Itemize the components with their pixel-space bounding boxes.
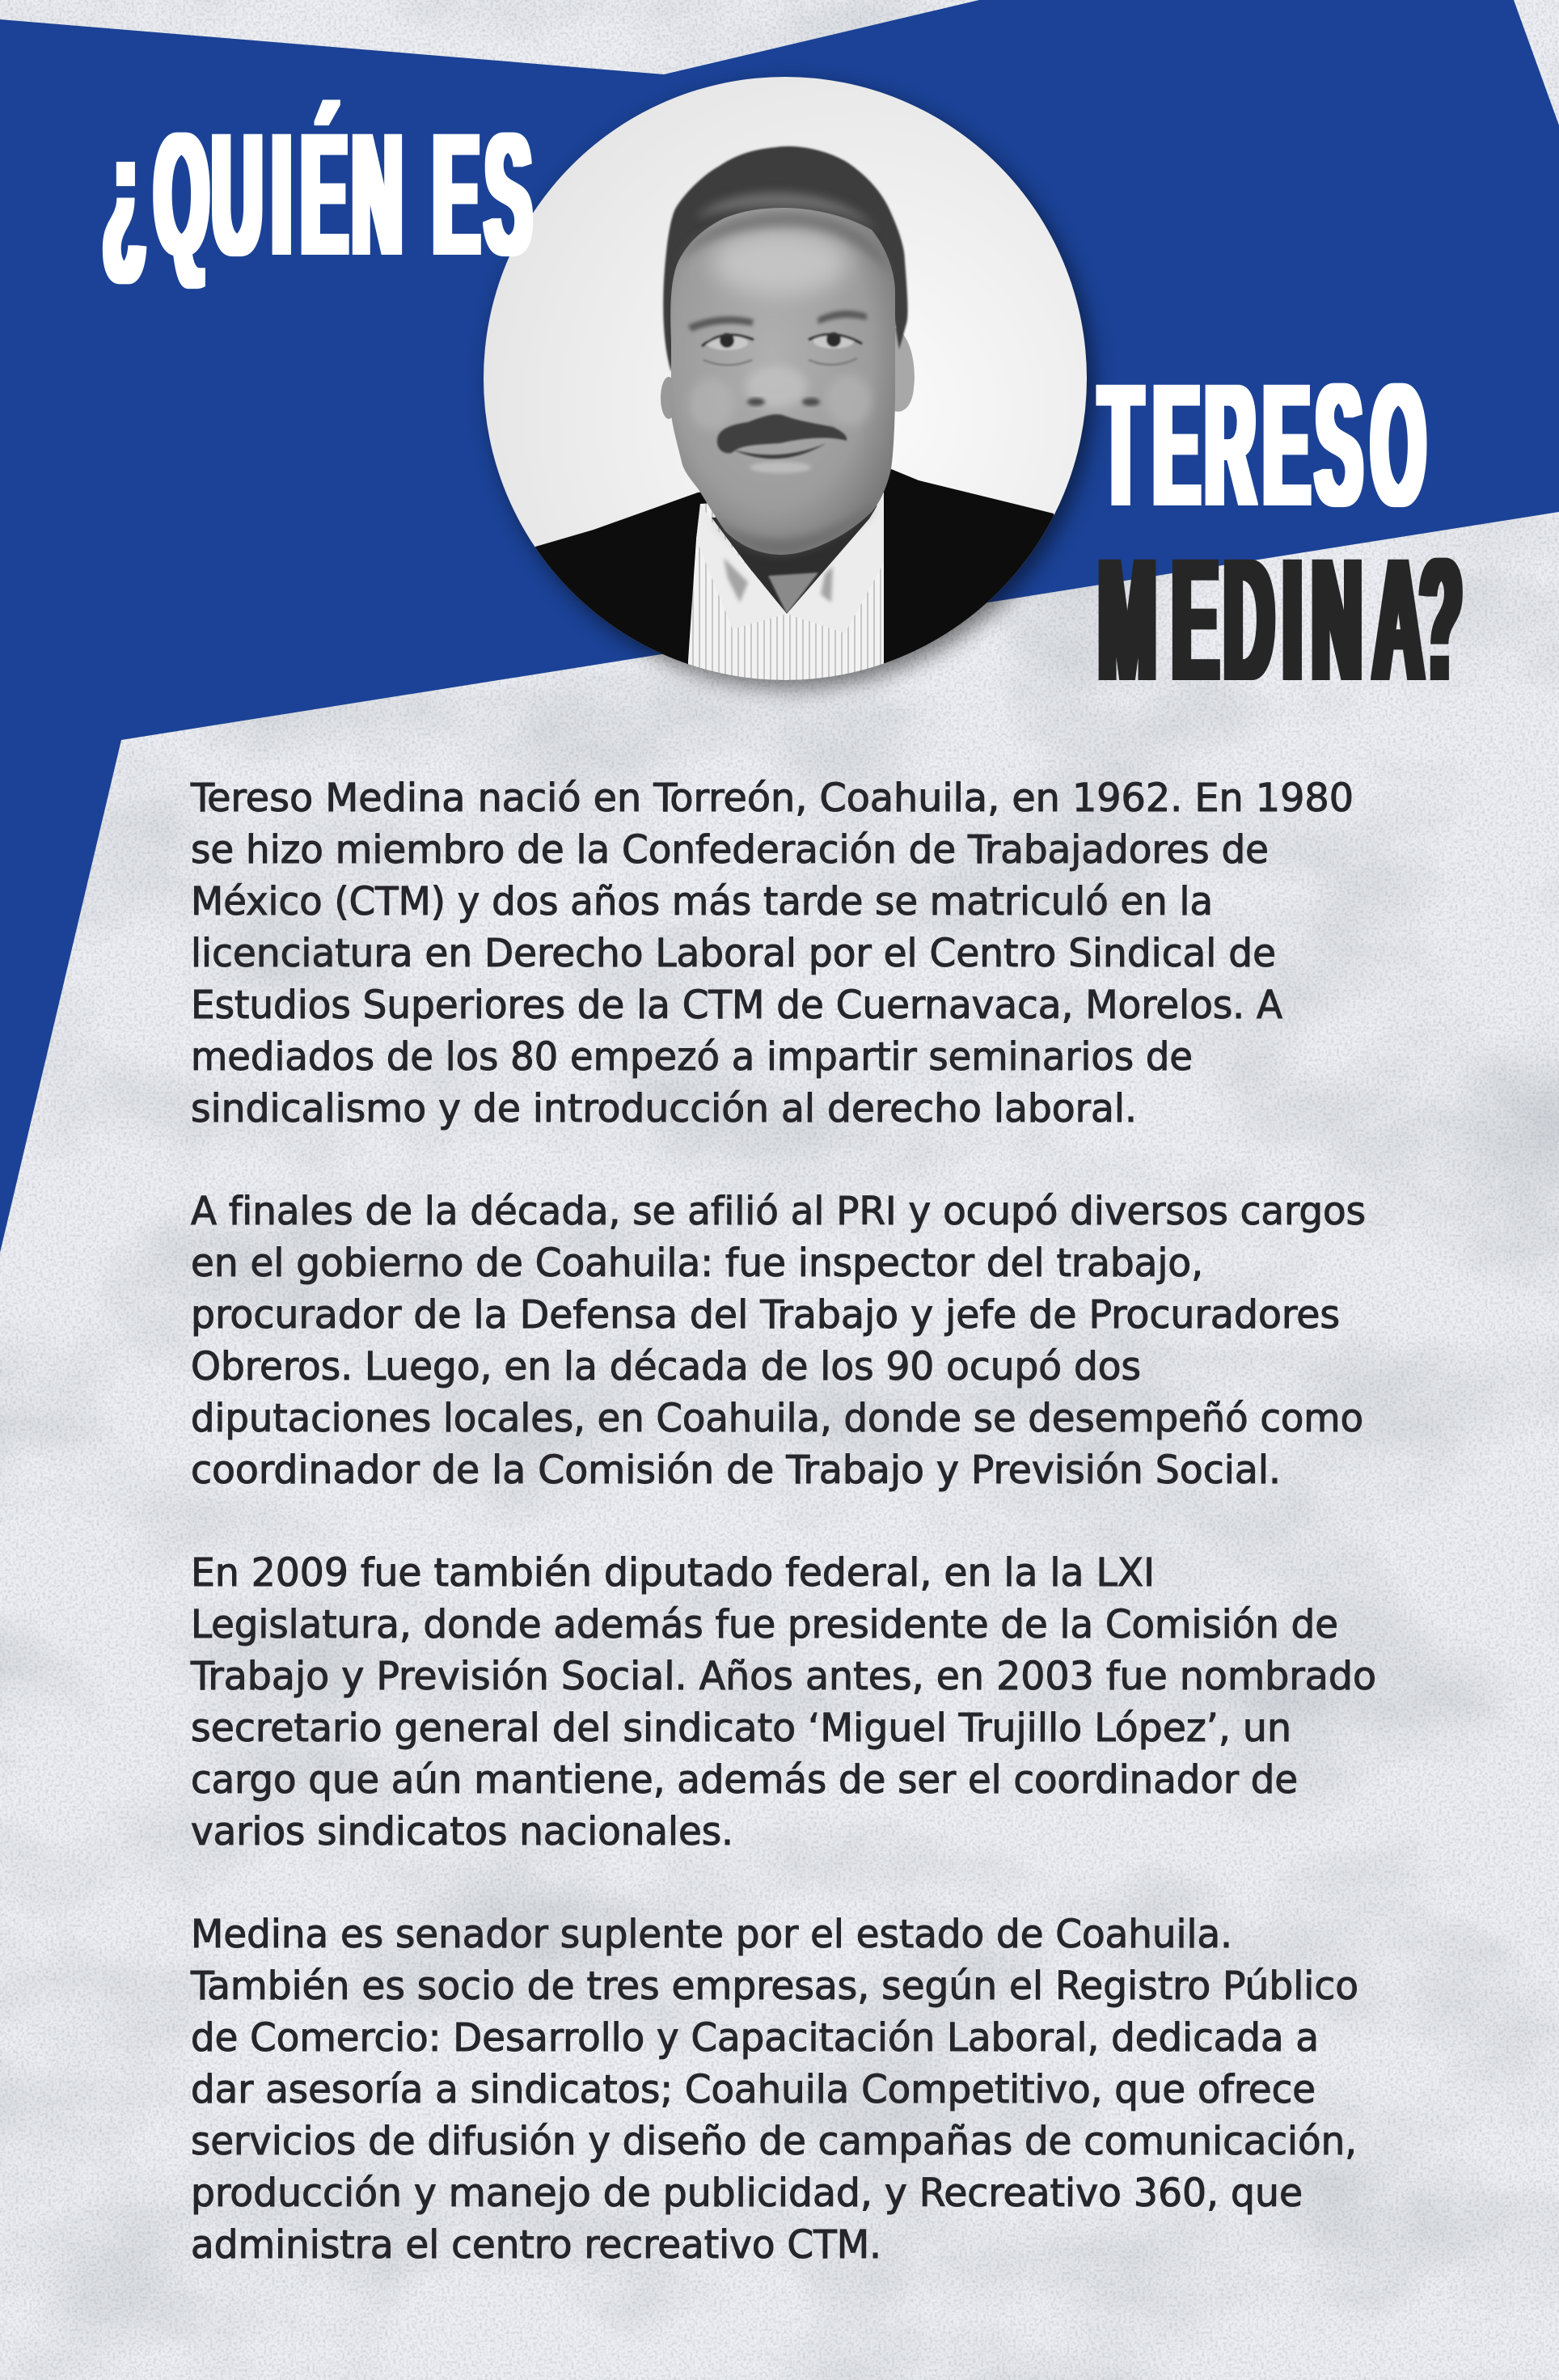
paragraph 2: coordinador de la Comisión de Trabajo y Previsión Social. xyxy=(191,1448,1281,1493)
paragraph 1: licenciatura en Derecho Laboral por el Centro Sindical de xyxy=(191,931,1276,976)
ears xyxy=(661,377,671,419)
eye bags xyxy=(703,358,857,366)
paragraph 1: México (CTM) y dos años más tarde se matriculó en la xyxy=(191,879,1213,924)
paragraph 4: dar asesoría a sindicatos; Coahuila Competitivo, que ofrece xyxy=(191,2067,1316,2112)
title: TERESO: TERESO xyxy=(1100,348,1426,542)
paragraph 4: producción y manejo de publicidad, y Recreativo 360, que xyxy=(191,2171,1303,2216)
paragraph 2: diputaciones locales, en Coahuila, donde se desempeñó como xyxy=(191,1396,1363,1441)
paragraph 2: A finales de la década, se afilió al PRI y ocupó diversos cargos xyxy=(191,1189,1366,1234)
paragraph 4 xyxy=(190,1912,1358,2268)
paragraph 3 xyxy=(190,1550,1376,1854)
paragraph 2: procurador de la Defensa del Trabajo y jefe de Procuradores xyxy=(191,1292,1340,1338)
paragraph 1: sindicalismo y de introducción al derecho laboral. xyxy=(191,1086,1137,1131)
paragraph 3: Trabajo y Previsión Social. Años antes, en 2003 fue nombrado xyxy=(190,1654,1376,1699)
paragraph 1: Estudios Superiores de la CTM de Cuernavaca, Morelos. A xyxy=(191,983,1283,1028)
paragraph 2 xyxy=(191,1189,1366,1493)
hair xyxy=(663,146,907,372)
paragraph 4: También es socio de tres empresas, según el Registro Público xyxy=(190,1964,1358,2009)
portrait photo xyxy=(477,73,1093,695)
paragraph 3: En 2009 fue también diputado federal, en la la LXI xyxy=(191,1550,1155,1596)
eyes xyxy=(702,332,862,350)
cheek highlights xyxy=(689,374,872,430)
paragraph 1: mediados de los 80 empezó a impartir seminarios de xyxy=(191,1034,1193,1080)
paragraph 1 xyxy=(190,776,1354,1131)
forehead highlight xyxy=(712,230,849,295)
paragraph 2: en el gobierno de Coahuila: fue inspector del trabajo, xyxy=(191,1241,1203,1286)
title: MEDINA?: MEDINA? xyxy=(1098,522,1462,717)
title: ¿QUIÉN ES: ¿QUIÉN ES xyxy=(104,97,531,291)
eyebrows xyxy=(688,311,867,332)
shirt xyxy=(688,492,884,695)
paragraph 4: administra el centro recreativo CTM. xyxy=(191,2222,881,2268)
paragraph 1: Tereso Medina nació en Torreón, Coahuila, en 1962. En 1980 xyxy=(190,776,1354,821)
blue header shape xyxy=(0,0,1559,1253)
moustache xyxy=(717,414,847,453)
paragraph 3: secretario general del sindicato ‘Miguel Trujillo López’, un xyxy=(191,1706,1291,1751)
hairline shadow xyxy=(678,212,893,275)
hair highlight xyxy=(695,192,877,230)
lower face shadow xyxy=(712,505,873,555)
paragraph 1: se hizo miembro de la Confederación de Trabajadores de xyxy=(191,827,1269,873)
neck xyxy=(712,505,877,614)
mouth xyxy=(733,443,826,459)
face xyxy=(670,208,895,555)
paragraph 4: Medina es senador suplente por el estado de Coahuila. xyxy=(191,1912,1232,1957)
nose xyxy=(746,366,807,408)
paragraph 4: de Comercio: Desarrollo y Capacitación Laboral, dedicada a xyxy=(191,2015,1319,2061)
paragraph 2: Obreros. Luego, en la década de los 90 ocupó dos xyxy=(191,1344,1141,1389)
shirt collar xyxy=(696,492,884,633)
jacket xyxy=(535,469,1054,680)
paragraph 3: cargo que aún mantiene, además de ser el coordinador de xyxy=(191,1757,1298,1803)
paragraph 4: servicios de difusión y diseño de campañas de comunicación, xyxy=(191,2119,1357,2164)
paragraph 3: Legislatura, donde además fue presidente de la Comisión de xyxy=(191,1602,1338,1647)
paragraph 3: varios sindicatos nacionales. xyxy=(191,1809,733,1854)
